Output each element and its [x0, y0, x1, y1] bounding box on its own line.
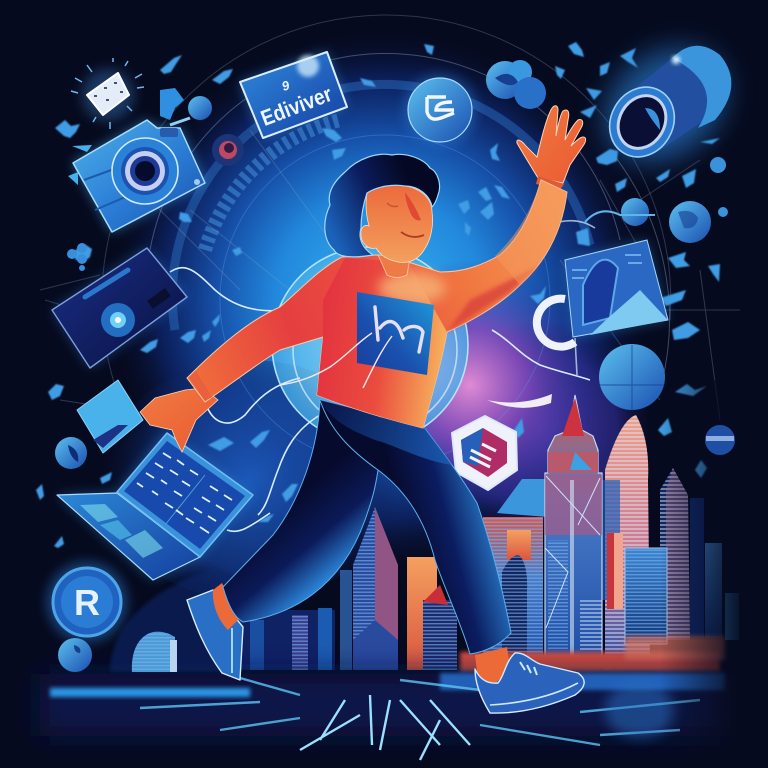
back shoe: [187, 590, 243, 680]
icon: large camera lens: [582, 25, 748, 185]
sweater wire: [280, 333, 392, 388]
concentric tech rings: [40, 15, 740, 465]
icon: small globe: [55, 437, 87, 469]
laptop base: [57, 493, 200, 580]
panel: holographic card: [565, 240, 668, 337]
city skyline: [240, 395, 739, 672]
back leg: [223, 400, 378, 622]
figure: person running: [140, 106, 586, 713]
floating data shards: [36, 42, 720, 548]
sign: brand card: [240, 52, 347, 138]
raised hand: [517, 106, 586, 190]
bright inner ring: [272, 247, 468, 443]
icon: cloud of blue orbs: [486, 60, 546, 109]
sign: brand card: Ediviver: [257, 81, 336, 131]
icon: shield logo orb: [404, 74, 476, 146]
icon: white ring: [537, 299, 575, 347]
swoosh: white stroke: [487, 394, 552, 408]
front ankle: [475, 647, 510, 684]
icon: large blue globe: [599, 344, 665, 410]
neck: [378, 255, 410, 278]
right edge fade: [660, 380, 768, 768]
icon: R badge: [47, 562, 127, 642]
icon: blue spheres on right: [585, 157, 728, 243]
icon: small satellite orb: [705, 425, 735, 455]
icon: tablet with glowing core: [52, 248, 187, 368]
icon: small card: [77, 380, 143, 453]
icon: small lens orb: [212, 134, 244, 166]
icon: small blue sphere: [58, 638, 92, 672]
front shoe: [475, 653, 584, 713]
icon: laptop: [57, 433, 253, 580]
icon: white hexagon badge: [452, 416, 517, 490]
hair: [325, 154, 440, 257]
back ankle: [213, 583, 240, 630]
central blue glow: [100, 25, 655, 600]
domed building lower left: [110, 570, 240, 672]
icon: lollipop orb and gem: [160, 88, 212, 125]
sweater: [187, 180, 567, 428]
wires behind the figure: [170, 221, 595, 531]
background towers: [483, 415, 739, 670]
face: [361, 185, 433, 262]
front leg: [320, 400, 511, 654]
red street glow: [460, 636, 725, 672]
laptop screen: [117, 433, 253, 557]
icon: white gem with rays: [71, 58, 144, 129]
icon: R badge: R: [74, 582, 100, 623]
main tower: [545, 395, 602, 662]
sign: brand card: 9: [280, 77, 292, 94]
road with light streaks: [40, 673, 730, 760]
left city behind leg: [240, 507, 457, 670]
icon: camera: [68, 120, 205, 232]
icon: cluster of small blue beads: [67, 243, 87, 271]
chest logo: [357, 292, 434, 375]
lowered hand: [140, 388, 218, 452]
